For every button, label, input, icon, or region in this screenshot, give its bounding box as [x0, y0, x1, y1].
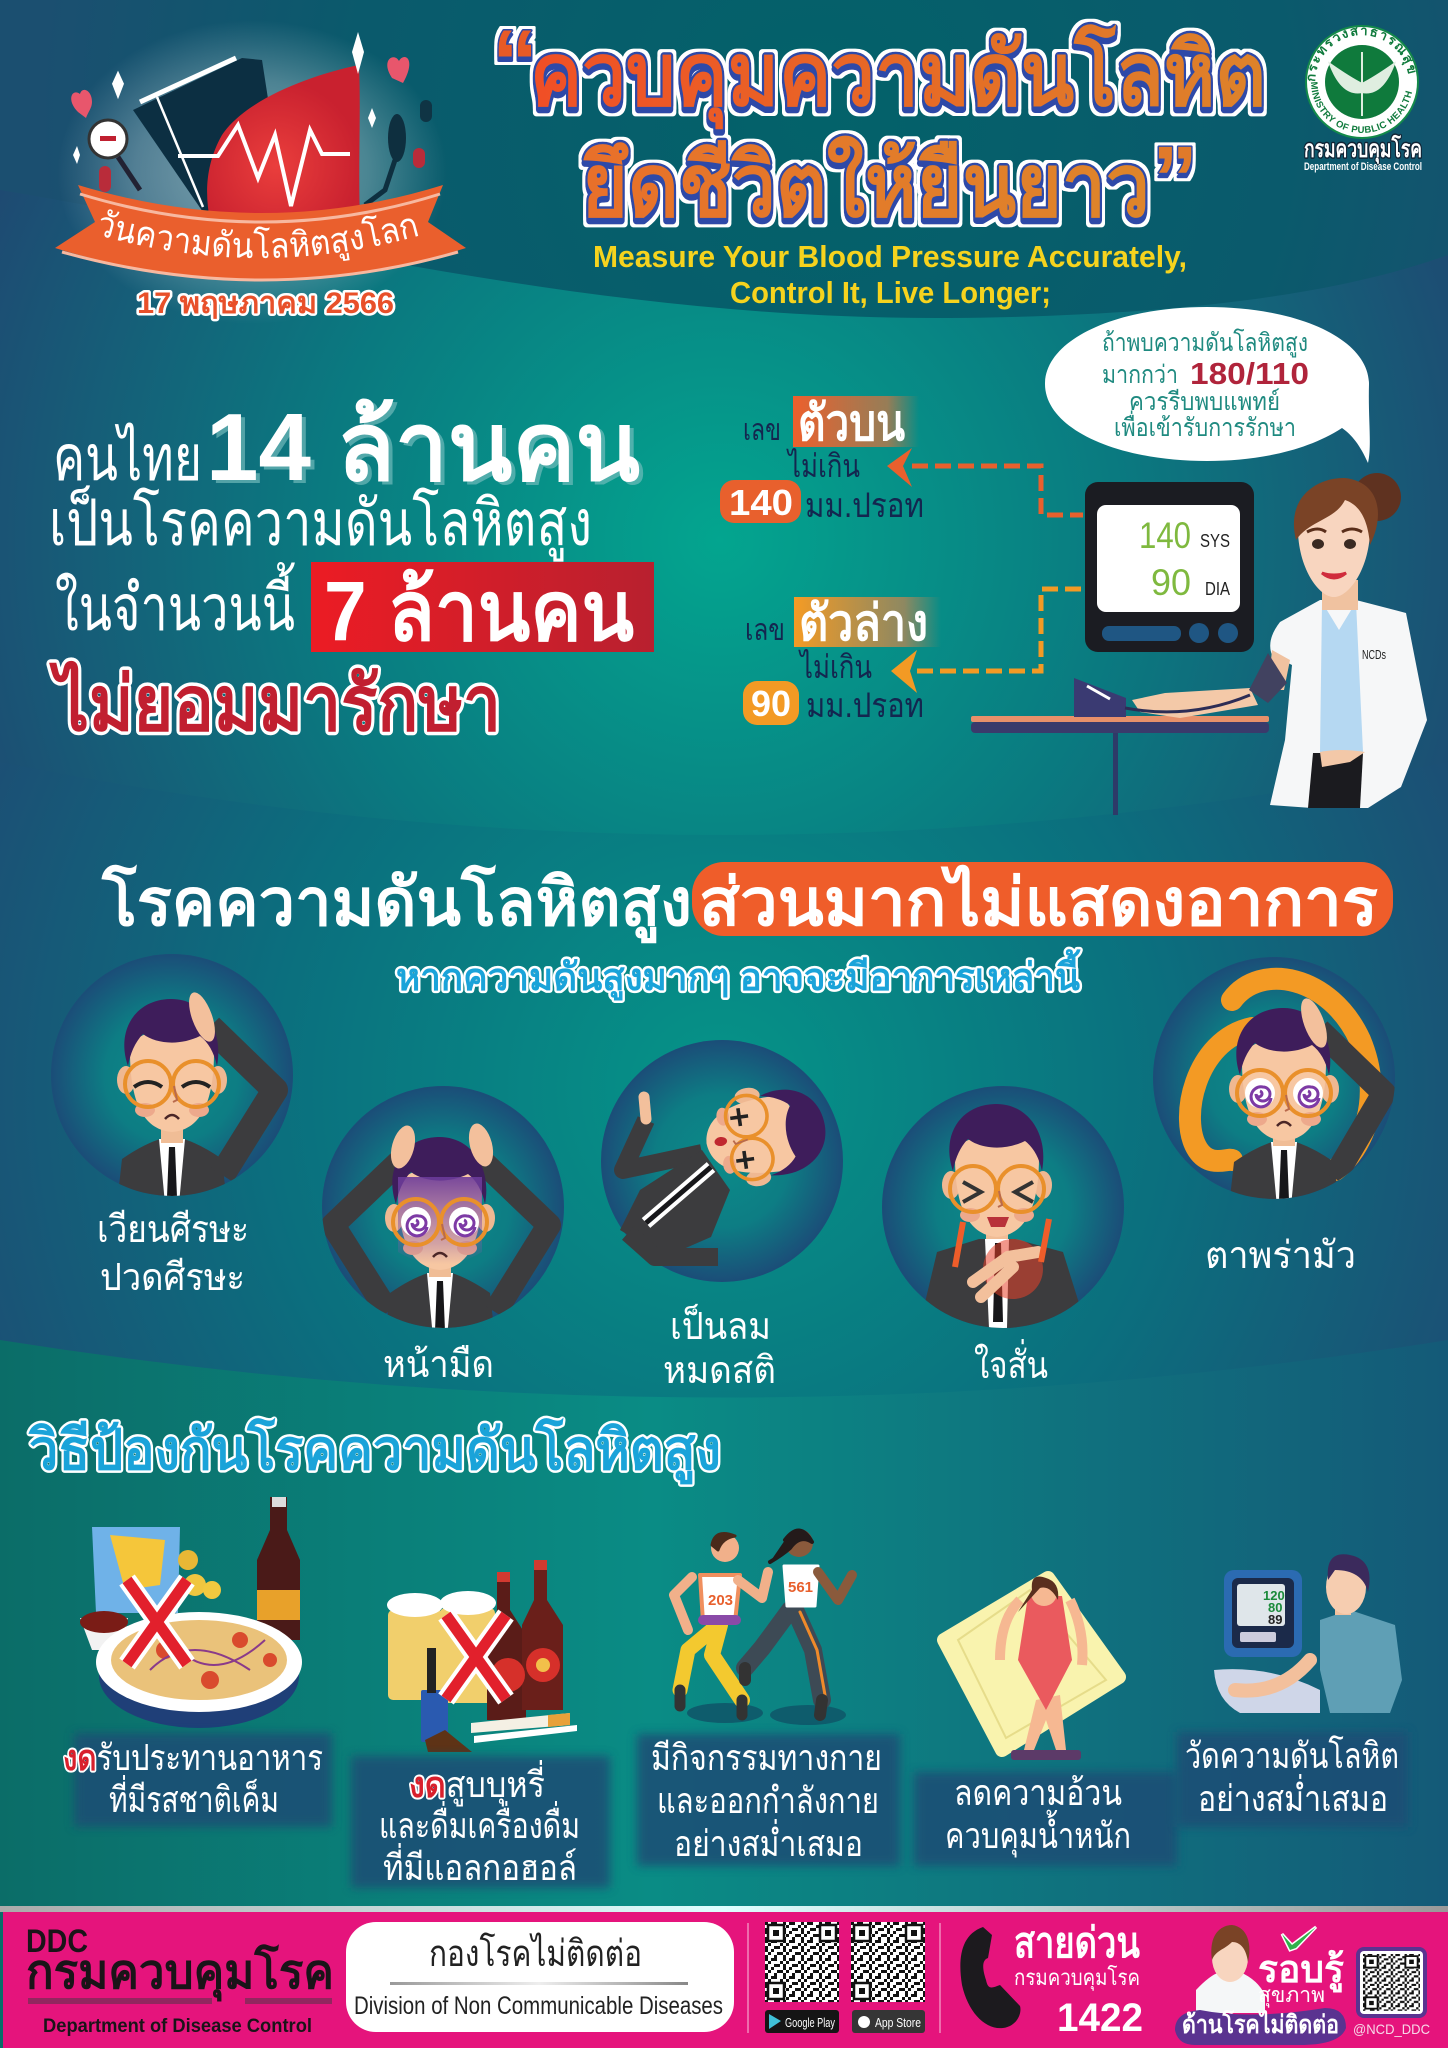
blood pressure monitor: [1085, 482, 1254, 652]
symptom: blurred vision: [1153, 957, 1395, 1277]
subheading: หากความดันสูงมากๆ อาจจะมีอาการเหล่านี้: [396, 949, 1081, 1001]
heading: asymptomatic: โรคความดันโลหิตสูง: [101, 863, 692, 944]
diastolic label: มม.ปรอท: [806, 687, 924, 725]
icon: phone: [960, 1927, 1020, 2028]
division box: [346, 1922, 734, 2032]
logo: ministry of public health: กระทรวงสาธารณสุข: [1308, 27, 1416, 82]
systolic label: ตัวบน: [798, 395, 905, 451]
label box: ลดความอ้วน: [954, 1772, 1122, 1813]
icon: runners: 561: [788, 1579, 813, 1596]
symptom: fainting: [601, 1040, 843, 1392]
division box: Division of Non Communicable Diseases: [354, 1992, 723, 2020]
symptom: palpitations: ใจสั่น: [974, 1339, 1048, 1387]
arrow: systolic: [887, 448, 1083, 515]
logo: ministry of public health: [1304, 25, 1422, 173]
doctor: [1125, 473, 1427, 808]
table with cuff device: [971, 678, 1269, 815]
subtitle: [593, 239, 1187, 310]
icon: man with monitor: 89: [1268, 1612, 1282, 1627]
arrow: diastolic: [891, 589, 1083, 693]
label box: [637, 1734, 900, 1866]
statement: 14 million Thais: ในจำนวนนี้: [55, 562, 296, 644]
speech bubble: ควรรีบพบแพทย์: [1129, 388, 1280, 416]
heading: asymptomatic: ส่วนมากไม่แสดงอาการ: [699, 864, 1378, 939]
label box: อย่างสม่ำเสมอ: [674, 1819, 863, 1864]
icon: blood pressure cuff: [133, 58, 286, 215]
prevention: control weight: [914, 1576, 1177, 1866]
symptom: dizzy, headache: เวียนศีรษะ: [97, 1209, 249, 1251]
systolic label: เลข: [743, 414, 781, 447]
symptom: palpitations: [882, 1086, 1124, 1387]
hotline: กรมควบคุมโรค: [1014, 1965, 1140, 1991]
title: ยึดชีวิตให้ยืนยาว: [582, 135, 1150, 235]
prevention: exercise: [637, 1529, 900, 1866]
heading: prevention: วิธีป้องกันโรคความดันโลหิตสูง: [28, 1417, 721, 1485]
statement: 14 million Thais: เป็นโรคความดันโลหิตสูง: [49, 486, 592, 562]
badge: World Hypertension Day: [55, 28, 466, 322]
label box: [1177, 1732, 1408, 1827]
heading: asymptomatic: [101, 862, 1393, 944]
health literacy badge: @NCD_DDC: [1353, 2021, 1430, 2037]
hotline: สายด่วน: [1014, 1919, 1140, 1966]
health literacy badge: สุขภาพ: [1258, 1984, 1325, 2008]
QR codes: Google Play: [785, 2015, 835, 2030]
hotline: 1422: [1057, 1996, 1143, 2040]
label box: [351, 1756, 610, 1888]
label box: [63, 1733, 332, 1827]
systolic label: มม.ปรอท: [805, 487, 924, 525]
blood pressure monitor: DIA: [1205, 579, 1230, 599]
DDC logo text: DDC: [26, 1923, 88, 1959]
label box: และดื่มเครื่องดื่ม: [379, 1801, 580, 1846]
icon: food with cross: [80, 1497, 302, 1728]
diastolic label: ตัวล่าง: [799, 595, 928, 651]
footer: [0, 1906, 1448, 2048]
symptom: dizzy, headache: [51, 954, 293, 1299]
label box: และออกกำลังกาย: [657, 1780, 879, 1821]
ribbon: [55, 185, 466, 282]
title: ควบคุมความดันโลหิต: [530, 24, 1266, 130]
icon: runners: [674, 1529, 852, 1725]
icon: hearts and sparkles: [71, 32, 432, 192]
label box: งดสูบบุหรี่: [409, 1760, 545, 1807]
speech bubble: 180/110: [1190, 356, 1309, 391]
DDC logo text: กรมควบคุมโรค: [26, 1943, 334, 2002]
ribbon: วันความดันโลหิตสูงโลก: [100, 209, 418, 261]
prevention: quit smoking and alcohol: [351, 1560, 610, 1888]
systolic label: 140: [729, 482, 793, 523]
icon: alcohol and cigarettes with cross: [387, 1560, 577, 1752]
icon: man with monitor: [1214, 1554, 1402, 1713]
QR codes: App Store: [875, 2015, 921, 2030]
health literacy badge: [1175, 1925, 1430, 2045]
diastolic label: ไม่เกิน: [798, 649, 872, 685]
icon: runners: 203: [708, 1592, 733, 1609]
icon: woman on scale: [944, 1576, 1119, 1760]
symptom: fainting: หมดสติ: [663, 1350, 776, 1392]
statement: 14 million Thais: คนไทย: [53, 422, 202, 494]
QR codes: [765, 1922, 925, 2033]
icon: man with monitor: 120: [1263, 1588, 1285, 1603]
label box: งดรับประทานอาหาร: [63, 1737, 323, 1778]
speech bubble: มากกว่า: [1102, 361, 1178, 389]
prevention: measure blood pressure: [1177, 1554, 1408, 1827]
symptom: blackout: [322, 1086, 564, 1386]
subtitle: Control It, Live Longer;: [730, 275, 1051, 310]
label box: [914, 1772, 1177, 1866]
label box: วัดความดันโลหิต: [1185, 1735, 1399, 1776]
speech bubble: เพื่อเข้ารับการรักษา: [1114, 410, 1296, 442]
symptom: blackout: หน้ามืด: [383, 1344, 494, 1386]
title: [492, 12, 1266, 235]
blood pressure monitor: 140: [1139, 515, 1191, 556]
icon: stethoscope: [365, 114, 406, 205]
statement: 14 million Thais: [49, 394, 654, 747]
symptom: fainting: เป็นลม: [670, 1303, 771, 1348]
statement: 14 million Thais: ไม่ยอมมารักษา: [49, 660, 501, 747]
DDC logo text: [26, 1923, 334, 2037]
diastolic label: [743, 595, 941, 725]
icon: blood drop with pulse: [178, 65, 360, 220]
division box: กองโรคไม่ติดต่อ: [429, 1932, 642, 1974]
label box: อย่างสม่ำเสมอ: [1198, 1774, 1388, 1819]
DDC logo text: Department of Disease Control: [43, 2016, 312, 2037]
health literacy badge: ด้านโรคไม่ติดต่อ: [1182, 2009, 1339, 2039]
systolic label: [720, 395, 924, 525]
doctor: NCDs: [1362, 647, 1386, 662]
systolic label: ไม่เกิน: [786, 448, 860, 484]
diastolic label: เลข: [745, 614, 785, 647]
speech bubble: ถ้าพบความดันโลหิตสูง: [1102, 328, 1308, 358]
symptom: dizzy, headache: ปวดศีรษะ: [100, 1257, 245, 1299]
label box: ที่มีรสชาติเค็ม: [109, 1775, 279, 1820]
symptom: blurred vision: ตาพร่ามัว: [1205, 1235, 1356, 1277]
blood pressure monitor: SYS: [1200, 531, 1230, 551]
icon: man with monitor: 80: [1268, 1600, 1282, 1615]
title: “: [492, 12, 538, 114]
diastolic label: 90: [751, 683, 791, 724]
label box: มีกิจกรรมทางกาย: [651, 1737, 882, 1778]
date: 17 พฤษภาคม 2566: [137, 287, 394, 320]
title: ”: [1152, 128, 1198, 230]
blood pressure monitor: 90: [1151, 562, 1191, 603]
label box: ที่มีแอลกอฮอล์: [383, 1843, 577, 1888]
red highlight: 7 million: 7 ล้านคน: [324, 564, 634, 658]
health literacy badge: รอบรู้: [1258, 1949, 1345, 1993]
icon: gauge: [89, 120, 140, 190]
label box: ควบคุมน้ำหนัก: [945, 1809, 1131, 1858]
speech bubble: [1045, 307, 1370, 463]
statement: 14 million Thais: 14 ล้านคน: [206, 394, 640, 501]
subtitle: Measure Your Blood Pressure Accurately,: [593, 239, 1187, 274]
prevention: reduce salty food: [63, 1497, 332, 1827]
hotline: [1014, 1919, 1143, 2040]
logo: ministry of public health: MINISTRY OF PUBLIC HEALTH: [1310, 82, 1412, 133]
